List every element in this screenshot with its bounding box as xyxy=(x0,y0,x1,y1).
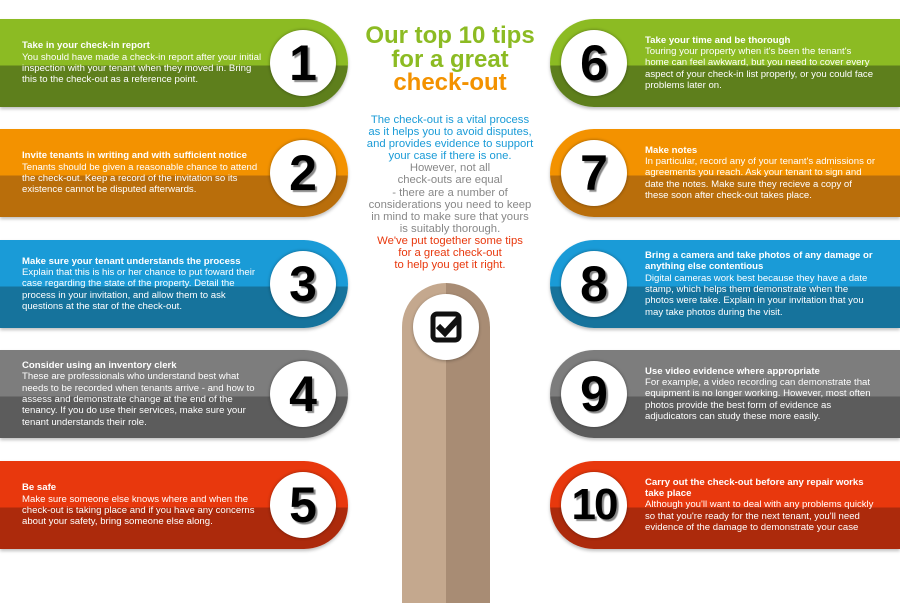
title: Our top 10 tips xyxy=(365,22,535,49)
intro text: The check-out is a vital process xyxy=(371,114,529,126)
panel 7: Make notes xyxy=(645,145,697,156)
intro text: check-outs are equal xyxy=(398,174,502,186)
central pillar xyxy=(402,283,490,603)
intro text: to help you get it right. xyxy=(394,259,506,271)
panel 3: Explain that this is his or her chance to put foward their case regarding the state of the property. Detail the process in your invitation, and allow them to ask questions at the star of the check-out. xyxy=(22,267,255,312)
panel 10 xyxy=(550,461,900,549)
panel 2 xyxy=(0,129,348,217)
panel 1: 1 xyxy=(289,35,317,91)
intro text: However, not all xyxy=(410,162,490,174)
panel 6: 6 xyxy=(580,35,608,91)
panel 2: Tenants should be given a reasonable chance to attend the check-out. Keep a record of the invitation so its existence cannot be disputed afterwards. xyxy=(22,162,257,195)
panel 5 xyxy=(0,461,348,549)
panel 8: Digital cameras work best because they have a date stamp, which helps them demonstrate when the photos were take. Explain in your invitation that you may take photos during the visit. xyxy=(645,273,867,318)
panel 4: These are professionals who understand best what needs to be recorded when tenants arrive - and how to assess and demonstrate change at the end of the tenancy. If you do use their services, make sure your tenant understands their role. xyxy=(22,371,255,428)
panel 1: Take in your check-in report xyxy=(22,40,150,51)
panel 9: Use video evidence where appropriate xyxy=(645,366,820,377)
panel 10: Although you'll want to deal with any problems quickly so that you're ready for the next tenant, you'll need evidence of the damage to demonstrate your case xyxy=(645,499,873,533)
panel 6: Touring your property when it's been the tenant's home can feel awkward, but you need to cover every aspect of your check-in list properly, or you could face problems later on. xyxy=(645,46,873,91)
panel 7: 7 xyxy=(580,145,608,201)
panel 1: You should have made a check-in report after your initial inspection with your tenant when they moved in. Bring this to the check-out as a reference point. xyxy=(22,52,261,85)
intro text: considerations you need to keep xyxy=(369,199,531,211)
panel 5: 5 xyxy=(289,477,317,533)
panel 2: 2 xyxy=(289,145,317,201)
intro text xyxy=(367,114,534,271)
panel 9 xyxy=(550,350,900,438)
title: for a great xyxy=(391,46,509,72)
panel 5: Make sure someone else knows where and when the check-out is taking place and if you have any concerns about your safety, bring someone else along. xyxy=(22,494,255,527)
panel 6 xyxy=(550,19,900,107)
panel 2: Invite tenants in writing and with sufficient notice xyxy=(22,150,247,161)
panel 10: 10 xyxy=(572,480,616,529)
panel 4: Consider using an inventory clerk xyxy=(22,360,177,371)
panel 10: Carry out the check-out before any repair works take place xyxy=(645,477,864,499)
panel 8 xyxy=(550,240,900,328)
panel 5: Be safe xyxy=(22,482,56,493)
intro text: in mind to make sure that yours xyxy=(371,211,529,223)
intro text: We've put together some tips xyxy=(377,235,523,247)
intro text: is suitably thorough. xyxy=(400,223,500,235)
intro text: and provides evidence to support xyxy=(367,138,533,150)
panel 6: Take your time and be thorough xyxy=(645,35,790,46)
panel 3 xyxy=(0,240,348,328)
intro text: for a great check-out xyxy=(398,247,502,259)
panel 4: 4 xyxy=(289,366,317,422)
panel 4 xyxy=(0,350,348,438)
icon: checkbox xyxy=(413,294,479,360)
panel 7: In particular, record any of your tenant's admissions or agreements you reach. Ask your tenant to sign and date the notes. Make sure they recieve a copy of these soon after check-out takes place. xyxy=(645,156,875,201)
intro text: - there are a number of xyxy=(392,187,508,199)
title xyxy=(365,22,535,96)
panel 1 xyxy=(0,19,348,107)
panel 7 xyxy=(550,129,900,217)
panel 9: For example, a video recording can demonstrate that equipment is no longer working. However, most often photos provide the best form of evidence as adjudicators can study these more easily. xyxy=(645,377,871,422)
intro text: your case if there is one. xyxy=(388,150,512,162)
panel 3: Make sure your tenant understands the process xyxy=(22,256,241,267)
panel 8: 8 xyxy=(580,256,608,312)
panel 8: Bring a camera and take photos of any damage or anything else contentious xyxy=(645,250,873,272)
title: check-out xyxy=(393,69,507,96)
intro text: as it helps you to avoid disputes, xyxy=(368,126,532,138)
panel 9: 9 xyxy=(580,366,608,422)
panel 3: 3 xyxy=(289,256,317,312)
